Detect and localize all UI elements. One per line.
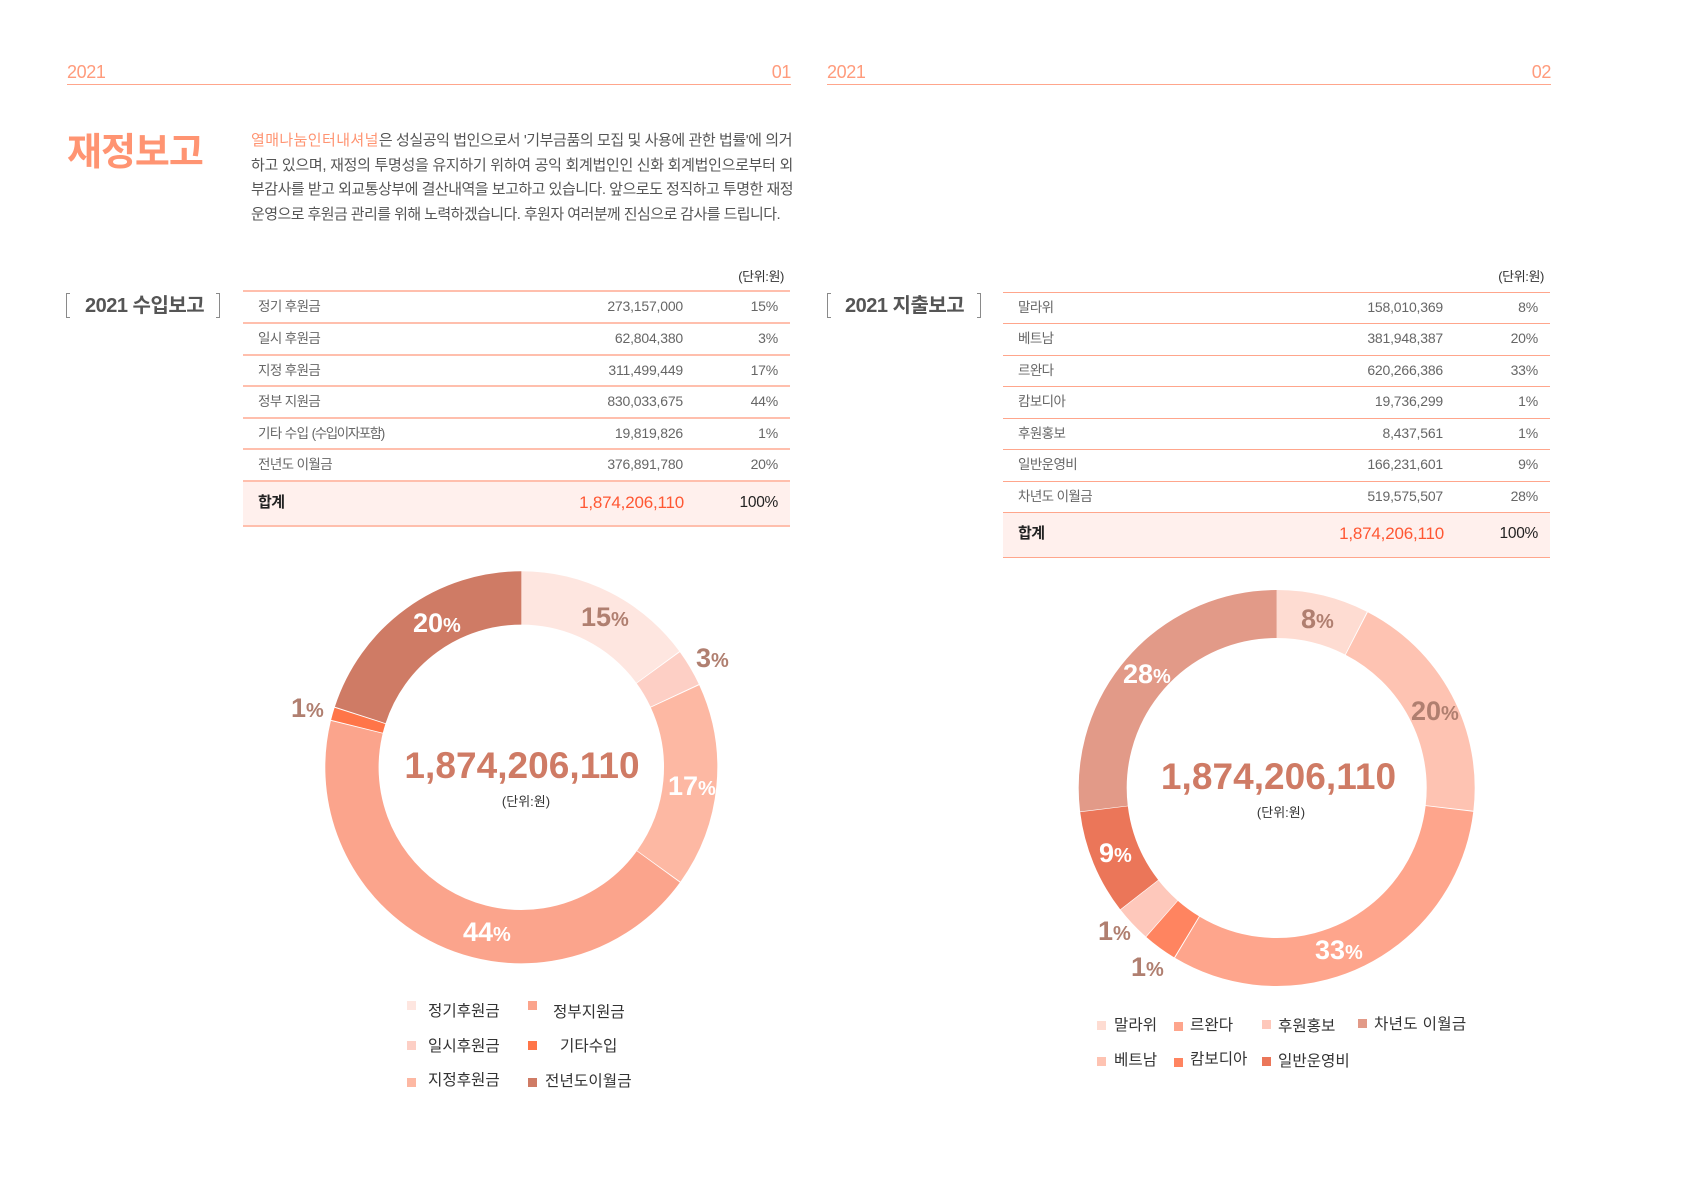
- table: expenses: 28%: [1511, 488, 1538, 504]
- donut chart: income: 1%: [291, 693, 324, 723]
- donut chart: expenses: 1%: [1131, 952, 1164, 982]
- intro text block: [251, 132, 793, 223]
- table: expenses: 1%: [1518, 393, 1538, 409]
- table: expenses: 8%: [1518, 298, 1538, 314]
- table: income: 전년도 이월금: [258, 457, 332, 472]
- table: expenses: 19,736,299: [1375, 393, 1443, 409]
- table: expenses: 르완다: [1018, 362, 1053, 378]
- table: income: 정부 지원금: [258, 394, 320, 409]
- donut chart: income: 1,874,206,110: [404, 745, 640, 786]
- table: expenses: 후원홍보: [1018, 426, 1065, 440]
- title: 재정보고: [67, 132, 203, 174]
- intro text block: 하고 있으며, 재정의 투명성을 유지하기 위하여 공익 회계법인인 신화 회계법인으로부터 외: [251, 157, 793, 174]
- legend: expenses: 캄보디아: [1190, 1051, 1247, 1068]
- table: expenses: 8,437,561: [1383, 424, 1443, 440]
- table: income: 311,499,449: [608, 362, 683, 378]
- section heading: expenses: [827, 293, 981, 318]
- legend: expenses: 말라위: [1114, 1017, 1157, 1034]
- donut chart: income: 3%: [696, 643, 729, 673]
- table: expenses: 620,266,386: [1367, 362, 1443, 378]
- donut chart: expenses: (단위:원): [1257, 805, 1305, 820]
- header: left page: 01: [772, 62, 791, 82]
- table: income: 62,804,380: [615, 330, 683, 346]
- legend: expenses: 차년도 이월금: [1374, 1016, 1467, 1033]
- table: expenses: 100%: [1500, 524, 1538, 542]
- table: expenses: 20%: [1511, 330, 1538, 346]
- table: income: 100%: [740, 494, 778, 510]
- legend: expenses: 후원홍보: [1278, 1018, 1335, 1035]
- donut chart: expenses: 20%: [1411, 696, 1459, 726]
- donut chart: income: 15%: [581, 602, 629, 632]
- donut chart: expenses: 1%: [1098, 916, 1131, 946]
- header: right page: [827, 62, 1551, 85]
- table: income: [243, 290, 790, 527]
- table: income: 정기 후원금: [258, 299, 320, 314]
- table: expenses: 차년도 이월금: [1018, 488, 1092, 504]
- table: expenses: 캄보디아: [1018, 394, 1065, 409]
- header: right page: 2021: [827, 62, 865, 82]
- donut chart: expenses: 28%: [1123, 659, 1171, 689]
- legend: income: 일시후원금: [428, 1038, 500, 1055]
- section heading: income: [66, 293, 220, 318]
- legend: income: 기타수입: [560, 1038, 617, 1055]
- header: right page: 02: [1532, 62, 1551, 82]
- donut chart: income: 17%: [668, 771, 716, 801]
- intro text block: 운영으로 후원금 관리를 위해 노력하겠습니다. 후원자 여러분께 진심으로 감사를 드립니다.: [251, 206, 780, 223]
- unit note: expense table: (단위:원): [1498, 269, 1544, 284]
- table: income: 기타 수입 (수입이자포함): [258, 426, 384, 440]
- table: income: 15%: [751, 298, 778, 314]
- table: expenses: 158,010,369: [1367, 298, 1443, 314]
- donut chart: expenses: 1,874,206,110: [1161, 756, 1396, 797]
- table: income: 44%: [751, 393, 778, 409]
- table: income: 376,891,780: [607, 456, 683, 472]
- legend: expenses: 일반운영비: [1278, 1053, 1350, 1070]
- table: expenses: 33%: [1511, 362, 1538, 378]
- table: expenses: 519,575,507: [1367, 488, 1443, 504]
- legend: expenses: [1097, 1016, 1467, 1070]
- donut chart: expenses: 8%: [1301, 604, 1334, 634]
- legend: expenses: 베트남: [1114, 1052, 1157, 1069]
- table: expenses: 381,948,387: [1367, 330, 1443, 346]
- table: income: 1,874,206,110: [579, 492, 684, 512]
- table: income: 1%: [758, 424, 778, 440]
- table: income: 20%: [751, 456, 778, 472]
- donut chart: income: 44%: [463, 917, 511, 947]
- table: expenses: 9%: [1518, 456, 1538, 472]
- section heading: expenses: 2021 지출보고: [845, 295, 964, 317]
- unit note: income table: (단위:원): [738, 269, 784, 284]
- table: expenses: 합계: [1018, 524, 1044, 542]
- donut chart: expenses: 33%: [1315, 935, 1363, 965]
- legend: income: 정부지원금: [553, 1004, 625, 1021]
- legend: income: 지정후원금: [428, 1072, 500, 1089]
- legend: expenses: 르완다: [1190, 1017, 1233, 1034]
- table: income: 일시 후원금: [258, 331, 320, 346]
- header: left page: [67, 62, 791, 85]
- table: expenses: 일반운영비: [1018, 457, 1077, 472]
- table: income: 17%: [751, 362, 778, 378]
- header: left page: 2021: [67, 62, 105, 82]
- table: income: 지정 후원금: [258, 362, 320, 378]
- table: expenses: 말라위: [1018, 300, 1053, 314]
- table: income: 830,033,675: [607, 393, 683, 409]
- donut chart: income: [291, 571, 729, 964]
- section heading: income: 2021 수입보고: [85, 295, 204, 317]
- legend: income: 전년도이월금: [545, 1073, 632, 1090]
- table: expenses: 베트남: [1018, 331, 1053, 346]
- legend: income: 정기후원금: [428, 1003, 500, 1020]
- donut chart: expenses: 9%: [1099, 838, 1132, 868]
- legend: income: [407, 1001, 632, 1090]
- donut chart: income: (단위:원): [502, 794, 550, 809]
- table: expenses: 1,874,206,110: [1339, 524, 1444, 542]
- table: income: 합계: [258, 494, 284, 510]
- intro text block: 열매나눔인터내셔널은 성실공익 법인으로서 '기부금품의 모집 및 사용에 관한 법률'에 의거: [251, 132, 792, 149]
- table: income: 3%: [758, 330, 778, 346]
- table: income: 19,819,826: [615, 424, 683, 440]
- donut chart: expenses: [1078, 590, 1475, 986]
- table: income: 273,157,000: [607, 298, 683, 314]
- donut chart: income: 20%: [413, 608, 461, 638]
- intro text block: 부감사를 받고 외교통상부에 결산내역을 보고하고 있습니다. 앞으로도 정직하고 투명한 재정: [251, 181, 793, 198]
- table: expenses: 1%: [1518, 424, 1538, 440]
- table: expenses: [1003, 292, 1550, 558]
- table: expenses: 166,231,601: [1367, 456, 1443, 472]
